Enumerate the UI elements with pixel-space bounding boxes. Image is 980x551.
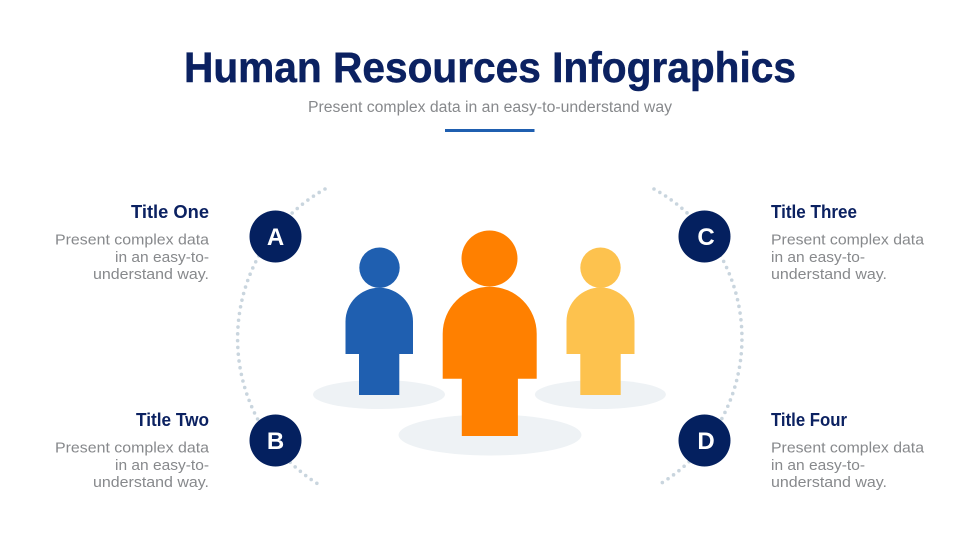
text block: Title Three: understand way. (771, 267, 887, 283)
text block: Title Three (771, 202, 925, 283)
text block: Title One: Title One (131, 202, 209, 222)
text block: Title Three: Title Three (771, 202, 857, 222)
text block: Title Four: Present complex data (771, 440, 925, 456)
text block: Title Four: Title Four (771, 410, 847, 430)
text block: Title Three: Present complex data (771, 232, 925, 248)
text block: Title Two: understand way. (93, 475, 209, 491)
badge C: C (697, 224, 715, 251)
title: Human Resources Infographics (184, 44, 796, 92)
text block: Title One: understand way. (93, 267, 209, 283)
text block: Title Two: Title Two (136, 410, 209, 430)
badge C (678, 210, 730, 262)
text block: Title Four: understand way. (771, 475, 887, 491)
text block: Title Four (771, 410, 925, 491)
subtitle: Present complex data in an easy-to-understand way (308, 99, 672, 116)
text block: Title Four: in an easy-to- (771, 458, 865, 474)
badge A (250, 210, 302, 262)
badge D (678, 414, 730, 466)
badge B: B (267, 428, 284, 455)
person: blue with shadow (313, 248, 445, 409)
text block: Title Two (55, 410, 210, 491)
text block: Title Two: Present complex data (55, 440, 210, 456)
person: orange with shadow (398, 230, 582, 456)
title underline accent (445, 129, 534, 132)
badge A: A (267, 224, 284, 251)
text block: Title One: Present complex data (55, 232, 210, 248)
badge D: D (697, 428, 715, 455)
text block: Title Two: in an easy-to- (115, 458, 209, 474)
dotted arc: right (654, 189, 742, 484)
person: yellow with shadow (535, 248, 666, 409)
dotted arc: left (238, 189, 325, 484)
text block: Title Three: in an easy-to- (771, 250, 865, 266)
badge B (250, 414, 302, 466)
text block: Title One: in an easy-to- (115, 250, 209, 266)
text block: Title One (55, 202, 210, 283)
